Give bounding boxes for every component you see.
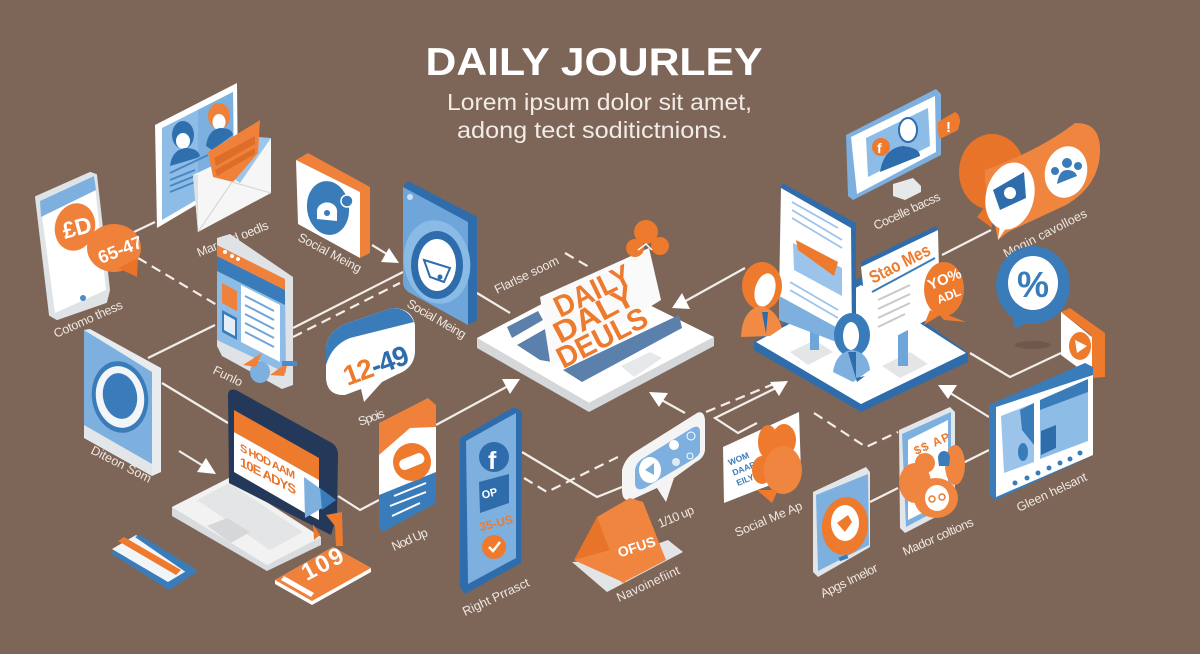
- mador phone: [899, 407, 955, 533]
- wide card: [989, 363, 1093, 500]
- label: Right Prrasct: [460, 575, 532, 619]
- bubble 12-49: [326, 308, 415, 402]
- subtitle: adong tect soditictnions.: [457, 117, 728, 143]
- orange tag: [938, 112, 960, 139]
- label: Cocelle bacss: [871, 190, 943, 233]
- label: Gleen helsant: [1014, 470, 1090, 515]
- left laptop: [172, 390, 343, 571]
- social app card: WOM: [727, 450, 750, 467]
- right standing panel: [861, 226, 940, 350]
- app speech bubble: [622, 412, 705, 502]
- orange cloud icon: [626, 220, 669, 257]
- label: Social Me Ap: [733, 499, 804, 540]
- label: Social Meing: [296, 230, 364, 276]
- central laptop: [477, 248, 714, 412]
- subtitle: [447, 89, 752, 143]
- profile card: [155, 83, 238, 228]
- social app card: EILY: [735, 472, 756, 488]
- nod up phone: [379, 398, 436, 532]
- phone top left: £D: [59, 211, 94, 244]
- right platform: [754, 277, 968, 412]
- left laptop: 10E ADYS: [240, 454, 296, 498]
- number card 109: [275, 541, 371, 605]
- bubble 65-47: 65-47: [95, 232, 145, 268]
- social app card: [723, 412, 802, 503]
- left tablet: [84, 329, 161, 476]
- orange tent sign: OFUS: [616, 533, 658, 560]
- app phone: [813, 467, 872, 577]
- bubble YO%: YO%: [925, 265, 964, 294]
- blue person: [833, 313, 870, 382]
- percent bubble: %: [1017, 264, 1049, 305]
- orange tag: !: [946, 119, 951, 136]
- facebook phone: [460, 407, 522, 594]
- bubble YO%: ADL: [935, 285, 963, 307]
- left standing panel: [778, 183, 856, 348]
- blue tablet: [397, 181, 477, 325]
- monitor: [846, 89, 941, 200]
- label: Social Meing: [404, 296, 469, 342]
- facebook phone: OP: [481, 486, 499, 502]
- label: Flarlse soom: [492, 253, 561, 297]
- subtitle: Lorem ipsum dolor sit amet,: [447, 89, 752, 115]
- left laptop: S HOD AAM: [240, 441, 295, 482]
- facebook phone: f: [488, 447, 497, 475]
- orange person: [741, 262, 782, 337]
- orange people badge: [899, 445, 965, 518]
- social app card: DAAP: [731, 459, 757, 478]
- label: Nod Up: [390, 525, 430, 554]
- pencils and gear: [243, 353, 297, 383]
- envelope with orange letter: [193, 120, 271, 232]
- facebook phone: 35-US: [478, 512, 514, 534]
- play tile: [1061, 308, 1105, 378]
- label: 1/10 up: [656, 503, 696, 531]
- central laptop: DAILY: [549, 259, 637, 324]
- monitor: f: [877, 140, 882, 156]
- bubble 12-49: 12-49: [339, 340, 412, 392]
- number card 109: 109: [297, 541, 350, 587]
- mador phone: $$ AP: [912, 430, 952, 458]
- label: Diteon Som: [89, 443, 154, 486]
- label: Navoinefiint: [614, 563, 682, 605]
- pencil pad: [110, 535, 197, 590]
- label: Spois: [356, 406, 386, 429]
- label: Apgs Imelor: [818, 561, 880, 601]
- orange tent sign: [572, 498, 683, 592]
- central laptop: DALY: [548, 280, 641, 350]
- bubble YO%: [924, 262, 966, 325]
- bubble 65-47: [87, 224, 145, 277]
- percent bubble: [996, 246, 1070, 329]
- connector lines and arrows: [134, 222, 1061, 510]
- orange speech bubble: [959, 123, 1100, 240]
- label: Cotomo thess: [52, 298, 125, 341]
- bubble shadow: [1015, 341, 1051, 349]
- central laptop: DEULS: [551, 301, 653, 375]
- label: Funlo: [211, 363, 245, 389]
- phone top left: [36, 173, 109, 319]
- label: Mara nd oedls: [195, 218, 271, 260]
- social tile: [296, 153, 370, 258]
- title: DAILY JOURLEY: [426, 41, 762, 84]
- checklist tablet: [217, 234, 293, 389]
- right standing panel: Stao Mes: [866, 240, 934, 288]
- label: Mogin cavolloes: [1001, 206, 1089, 261]
- label: Mador coltions: [901, 515, 976, 559]
